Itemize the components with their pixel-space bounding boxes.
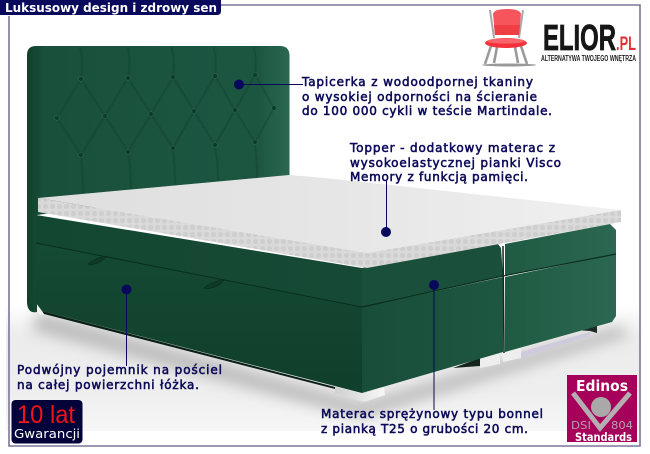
- callout: storage: na całej powierzchni łóżka.: [17, 378, 199, 392]
- callout: topper: wysokoelastycznej pianki Visco: [350, 156, 561, 170]
- storage loop handles: [88, 256, 224, 289]
- floor shadow: [6, 305, 640, 431]
- badge: Edinos standards: 804: [611, 419, 633, 432]
- callout: mattress: [321, 280, 543, 436]
- icon: red chair: [482, 9, 536, 66]
- callout: topper: [349, 141, 561, 237]
- callout: upholstery: o wysokiej odporności na ścieranie: [302, 90, 537, 104]
- callout: topper: Topper - dodatkowy materac z: [349, 141, 555, 155]
- bed: [27, 46, 621, 402]
- badge: 10 years warranty: 10 lat: [17, 401, 75, 429]
- badge: Edinos standards: Edinos: [576, 377, 628, 395]
- left long side of box: [36, 215, 362, 393]
- callout: upholstery: [234, 75, 552, 118]
- callout: mattress: z pianką T25 o grubości 20 cm.: [321, 422, 528, 436]
- callout: storage: [17, 284, 222, 392]
- badge: 10 years warranty: [12, 400, 82, 444]
- ELIOR.PL wordmark: ELIOR: [543, 17, 616, 58]
- logo: [482, 9, 636, 66]
- callout: storage: Podwójny pojemnik na pościel: [17, 363, 222, 377]
- badge: Edinos standards: DSI: [571, 419, 591, 432]
- callout: upholstery: Tapicerka z wodoodpornej tkaniny: [301, 75, 533, 89]
- bed feet: [39, 309, 597, 402]
- callout: topper: Memory z funkcją pamięci.: [350, 170, 528, 184]
- badge: Edinos standards: Standards: [575, 430, 632, 444]
- badge: Edinos standards: [567, 375, 637, 444]
- title bar: Luksusowy design i zdrowy sen: [5, 0, 217, 15]
- callout: upholstery: do 100 000 cykli w teście Martindale.: [302, 104, 552, 118]
- ELIOR.PL wordmark: .PL: [616, 34, 636, 55]
- topper mattress: [38, 175, 621, 268]
- badge: 10 years warranty: Gwarancji: [14, 427, 80, 441]
- headboard: [27, 46, 290, 312]
- tufted seams and buttons: [57, 47, 274, 193]
- front mattress and box: [362, 224, 616, 393]
- callout: mattress: Materac sprężynowy typu bonnel: [321, 407, 543, 421]
